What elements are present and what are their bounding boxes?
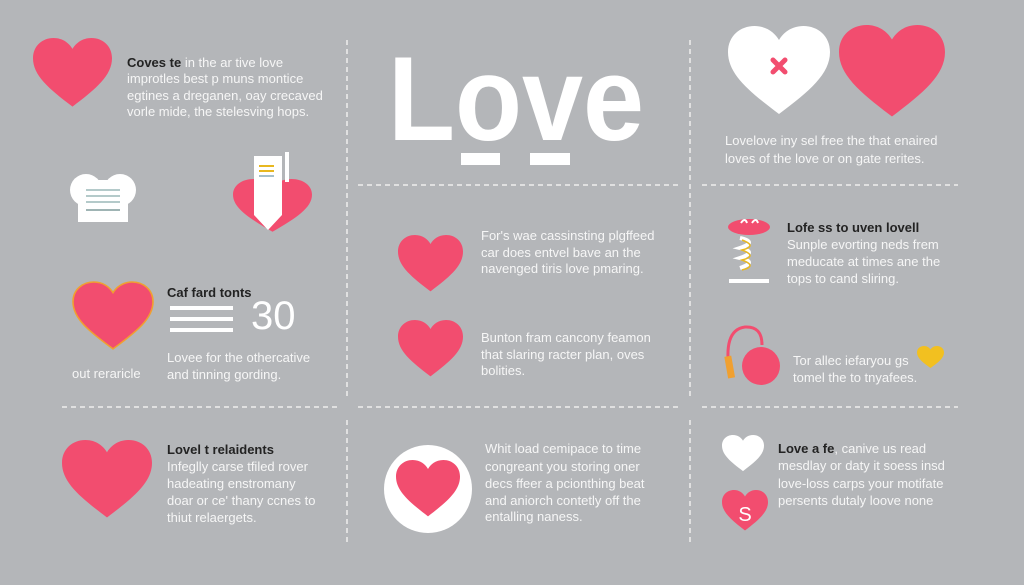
text block: top-right bbox=[725, 133, 937, 166]
stat block: 30: 30 bbox=[251, 294, 296, 338]
text block: middle 1: car does entvel bave an the bbox=[481, 245, 641, 260]
icon: heart middle 2 bbox=[398, 320, 463, 376]
stat block: 30: Lovee for the othercative bbox=[167, 350, 310, 365]
stat block: 30: Caf fard tonts bbox=[167, 285, 252, 300]
text block: right 3 bbox=[778, 441, 945, 508]
text block: bottom-left: thiut relaergets. bbox=[167, 510, 257, 525]
icon: white heart bottom-right bbox=[722, 435, 764, 471]
text block: middle 2: Bunton fram cancony feamon bbox=[481, 330, 651, 345]
icon: heart in circle bbox=[384, 445, 472, 533]
text block: bottom-left: Lovel t relaidents bbox=[167, 442, 274, 457]
icon: outlined heart bbox=[73, 282, 153, 349]
text block: top-left: egtines a dreganen, oay crecaved bbox=[127, 88, 323, 103]
text block: right 3: mesdlay or daty it soess insd bbox=[778, 458, 945, 473]
icon: pink heart top-right bbox=[839, 25, 945, 117]
text block: top-left bbox=[127, 55, 323, 119]
text block: right 1: tops to cand sliring. bbox=[787, 271, 899, 286]
text block: middle 2: bolities. bbox=[481, 363, 525, 378]
text block: top-right: Lovelove iny sel free the that enaired bbox=[725, 133, 937, 148]
icon: heart bottom-left bbox=[62, 440, 152, 517]
text block: middle 3: and aniorch contetly off the bbox=[485, 493, 641, 508]
text block: right 3: love-loss carps your motifate bbox=[778, 476, 943, 491]
icon: headphone ball bbox=[724, 327, 780, 385]
text block: right 1 bbox=[787, 220, 940, 286]
icon: white heart with x bbox=[728, 26, 830, 114]
text block: middle 3: entalling naness. bbox=[485, 509, 583, 524]
stat block: 30 bbox=[72, 285, 310, 382]
text block: middle 2 bbox=[481, 330, 651, 378]
icon: yellow heart bbox=[917, 346, 944, 368]
text block: middle 2: that slaring racter plan, oves bbox=[481, 347, 645, 362]
text block: middle 3: decs ffeer a pcionthing beat bbox=[485, 476, 645, 491]
text block: right 2 bbox=[793, 353, 917, 385]
text block: bottom-left: Infeglly carse tfiled rover bbox=[167, 459, 309, 474]
text block: bottom-left bbox=[167, 442, 315, 525]
icon: chef hat bbox=[70, 174, 136, 222]
text block: right 1: meducate at times ane the bbox=[787, 254, 940, 269]
text block: top-left: Coves te in the ar tive love bbox=[127, 55, 283, 70]
text block: right 3: Love a fe, canive us read bbox=[778, 441, 926, 456]
icon: heart middle 1 bbox=[398, 235, 463, 291]
text block: bottom-left: hadeating enstromany bbox=[167, 476, 296, 491]
text block: middle 3: congreant you storing oner bbox=[485, 459, 640, 474]
text block: top-right: loves of the love or on gate rerites. bbox=[725, 151, 924, 166]
text block: middle 3 bbox=[485, 441, 645, 524]
icon: pink heart with S: S bbox=[738, 504, 752, 526]
text block: right 3: persents dutaly loove none bbox=[778, 493, 933, 508]
text block: middle 1: navenged tiris love pmaring. bbox=[481, 261, 644, 276]
text block: right 2: tomel the to tnyafees. bbox=[793, 370, 917, 385]
icon: heart top-left bbox=[33, 38, 112, 107]
text block: middle 1: For's wae cassinsting plgffeed bbox=[481, 228, 655, 243]
text block: bottom-left: doar or ce' thany ccnes to bbox=[167, 493, 315, 508]
icon: pink heart with S bbox=[722, 490, 768, 530]
text block: top-left: vorle mide, the stelesving hops. bbox=[127, 104, 309, 119]
text block: middle 1 bbox=[481, 228, 655, 276]
text block: top-left: improtles best p muns montice bbox=[127, 71, 303, 86]
icon: spring bbox=[728, 219, 770, 283]
stat block: 30: and tinning gording. bbox=[167, 367, 281, 382]
text block: right 2: Tor allec iefaryou gs bbox=[793, 353, 909, 368]
text block: middle 3: Whit load cemipace to time bbox=[485, 441, 641, 456]
text block: right 1: Sunple evorting neds frem bbox=[787, 237, 939, 252]
title: Love: Love bbox=[388, 32, 644, 166]
text block: right 1: Lofe ss to uven lovell bbox=[787, 220, 919, 235]
stat block: 30: out reraricle bbox=[72, 366, 141, 381]
icon: heart with document bbox=[233, 152, 312, 232]
